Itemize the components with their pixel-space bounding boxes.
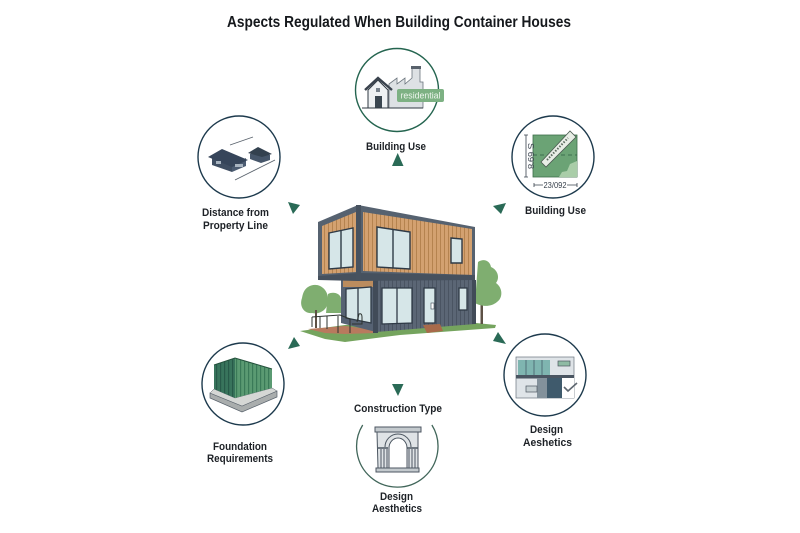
upper container	[318, 205, 475, 281]
label: Design	[530, 424, 563, 436]
label	[207, 441, 273, 465]
panel: design aesthetics (right)	[504, 334, 586, 449]
arrow: to upper left	[288, 202, 300, 214]
circle arc	[357, 425, 438, 487]
label: Aeshetics	[523, 437, 572, 449]
circle outline	[356, 48, 438, 132]
label: Building Use	[525, 205, 586, 217]
panel: foundation requirements	[202, 343, 284, 465]
label: Property Line	[203, 220, 268, 232]
circle outline	[504, 334, 586, 416]
label: construction type: Construction Type	[354, 403, 442, 415]
circle outline	[202, 343, 284, 425]
panel: building use (right)	[512, 116, 594, 217]
residential tag: residential	[400, 90, 440, 100]
label: design aesthetics: Aesthetics	[372, 503, 422, 515]
label	[523, 424, 572, 449]
label: design aesthetics: Design	[380, 491, 413, 503]
lower container	[341, 279, 476, 333]
arrow: to lower left	[288, 337, 300, 349]
arrow: to upper right	[493, 203, 506, 214]
title: Aspects Regulated When Building Container Houses	[227, 14, 571, 31]
label: design aesthetics	[372, 491, 422, 515]
panel: distance from property line	[198, 116, 280, 232]
icon: plot and ruler: S 69'8	[526, 143, 535, 170]
panel: building use (top)	[356, 48, 444, 153]
icon: two houses with distance lines	[208, 137, 275, 180]
label: Distance from	[202, 207, 269, 219]
trees	[301, 260, 501, 328]
icon: arch	[375, 427, 421, 472]
icon: plot and ruler: 23/092	[544, 181, 567, 190]
circle outline	[512, 116, 594, 198]
icon: building facade with check	[516, 357, 577, 398]
ground and patio	[300, 323, 496, 342]
icon: plot and ruler	[524, 131, 577, 190]
icon: container on slab	[210, 358, 277, 412]
central illustration: container house	[300, 205, 501, 342]
upper windows	[329, 227, 462, 269]
label: Building Use	[366, 141, 426, 153]
arrow: to top	[392, 153, 404, 166]
patio railing and chair	[312, 314, 362, 333]
label	[202, 207, 269, 232]
label: Foundation	[213, 441, 267, 453]
lower windows and door	[346, 287, 467, 324]
arrow: to lower right	[493, 332, 506, 344]
arrow: to bottom	[392, 384, 404, 396]
label: Requirements	[207, 453, 273, 465]
icon: factory and house	[362, 66, 423, 108]
circle outline	[198, 116, 280, 198]
panel: construction type / design aesthetics (bottom)	[354, 403, 442, 515]
